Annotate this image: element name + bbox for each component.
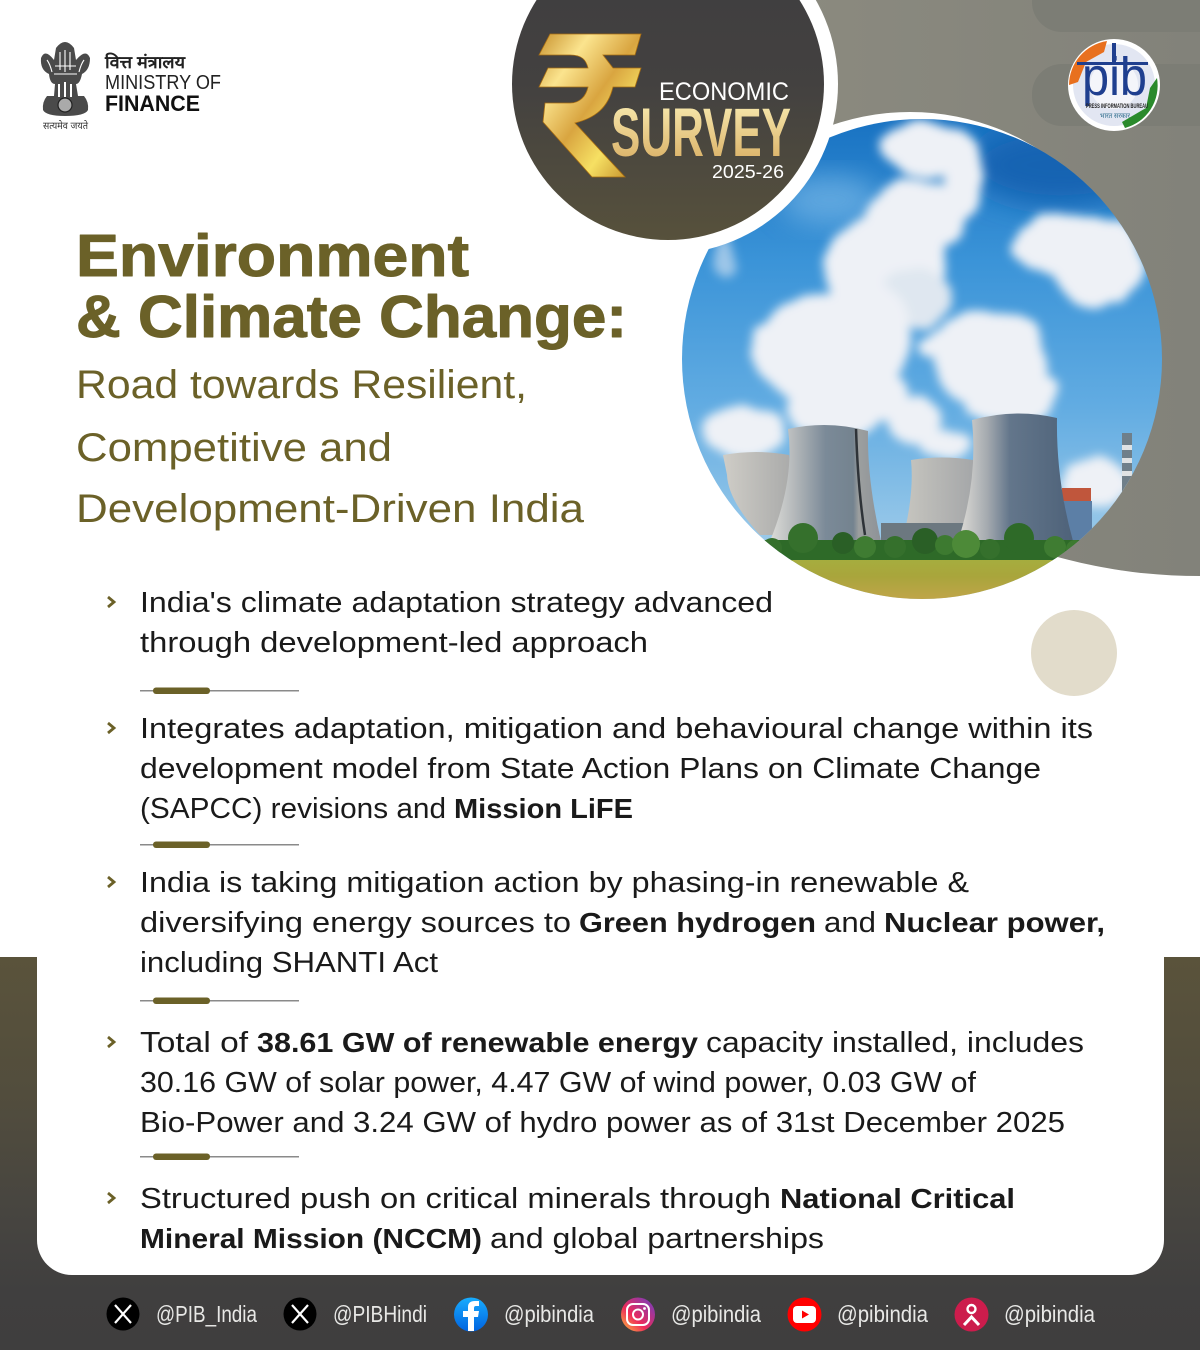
facebook: @pibindia — [504, 1301, 594, 1327]
bullet 1: India's climate adaptation strategy advanced — [140, 587, 773, 619]
bullet 2: Integrates adaptation, mitigation and behavioural change within its — [140, 713, 1093, 745]
ministry of finance logo: MINISTRY OF — [105, 72, 221, 94]
bullet 3 — [108, 867, 1105, 979]
x handle hindi: @PIBHindi — [333, 1301, 427, 1327]
subtitle: Road towards Resilient, — [76, 363, 527, 407]
far left tower — [723, 452, 790, 535]
economic survey wordmark: 2025-26 — [712, 162, 784, 182]
title: Environment — [76, 223, 469, 289]
industrial building — [1062, 488, 1092, 541]
x handle hindi — [284, 1298, 427, 1330]
far right chimney — [1122, 433, 1132, 493]
bullet 3: including SHANTI Act — [140, 947, 438, 979]
icon: gold rupee symbol — [539, 34, 641, 177]
bullet 3: and — [824, 907, 876, 939]
economic survey wordmark — [611, 78, 791, 182]
bullet 4: Total of — [140, 1027, 249, 1059]
title: & Climate Change: — [76, 284, 627, 350]
x handle india: @PIB_India — [156, 1301, 257, 1327]
bullet 3: India is taking mitigation action by phasing-in renewable & — [140, 867, 969, 899]
tallest tower — [958, 413, 1073, 541]
bullet 5: National Critical — [780, 1183, 1015, 1214]
pib logo — [1068, 39, 1160, 131]
social media footer — [106, 1298, 1095, 1332]
icon: national emblem: सत्यमेव जयते — [43, 120, 88, 132]
bullet 5 — [108, 1183, 1015, 1255]
icon: national emblem — [41, 42, 90, 132]
clouds and steam plumes — [703, 120, 1146, 506]
bullet 4: 30.16 GW of solar power, 4.47 GW of wind power, 0.03 GW of — [140, 1067, 977, 1099]
bullet 3: Nuclear power, — [884, 907, 1105, 938]
field — [791, 560, 1053, 599]
bullet 4: capacity installed, includes — [706, 1027, 1084, 1059]
youtube: @pibindia — [837, 1301, 928, 1327]
bullet 4 — [108, 1027, 1084, 1139]
pib logo: PRESS INFORMATION BUREAU — [1086, 104, 1148, 110]
decorative beige circle — [1031, 610, 1117, 696]
economic survey wordmark: ECONOMIC — [659, 78, 789, 106]
bullet 2: development model from State Action Plans on Climate Change — [140, 753, 1041, 785]
bullet 1 — [108, 587, 773, 659]
ministry of finance logo: वित्त मंत्रालय — [104, 52, 186, 72]
bullet 4: Bio-Power and 3.24 GW of hydro power as of 31st December 2025 — [140, 1107, 1065, 1139]
instagram: @pibindia — [671, 1301, 761, 1327]
ministry of finance logo — [41, 42, 221, 132]
subtitle: Development-Driven India — [76, 487, 585, 531]
photo: cooling towers under blue sky — [680, 118, 1165, 602]
bullet 4: 38.61 GW of renewable energy — [257, 1027, 698, 1058]
bullet 5: Mineral Mission (NCCM) — [140, 1223, 482, 1254]
koo style app: @pibindia — [1004, 1301, 1095, 1327]
third tower — [906, 458, 973, 523]
bullet 5: Structured push on critical minerals through — [140, 1183, 771, 1215]
bullet 1: through development-led approach — [140, 627, 648, 659]
x handle india — [106, 1298, 257, 1330]
subtitle — [76, 363, 585, 531]
bullet 5: and global partnerships — [490, 1223, 824, 1255]
subtitle: Competitive and — [76, 426, 392, 470]
bullet 2 — [108, 713, 1093, 825]
pib logo: भारत सरकार — [1100, 113, 1130, 120]
koo style app — [954, 1298, 1095, 1332]
second tower — [770, 425, 881, 541]
youtube — [788, 1298, 928, 1332]
bottom band — [0, 950, 1200, 1350]
bullet 2: Mission LiFE — [454, 793, 633, 824]
top right grey backdrop — [670, 0, 1200, 592]
title — [76, 223, 627, 350]
pib logo: pib — [1082, 47, 1147, 107]
economic survey badge — [498, 0, 838, 254]
ministry of finance logo: FINANCE — [105, 91, 200, 116]
bullet 3: Green hydrogen — [579, 907, 816, 938]
instagram — [621, 1298, 761, 1332]
economic survey wordmark: SURVEY — [611, 94, 791, 171]
bullet 2: (SAPCC) revisions and — [140, 793, 446, 825]
bullet 3: diversifying energy sources to — [140, 907, 571, 939]
facebook — [454, 1298, 594, 1332]
tree line — [764, 523, 1080, 561]
